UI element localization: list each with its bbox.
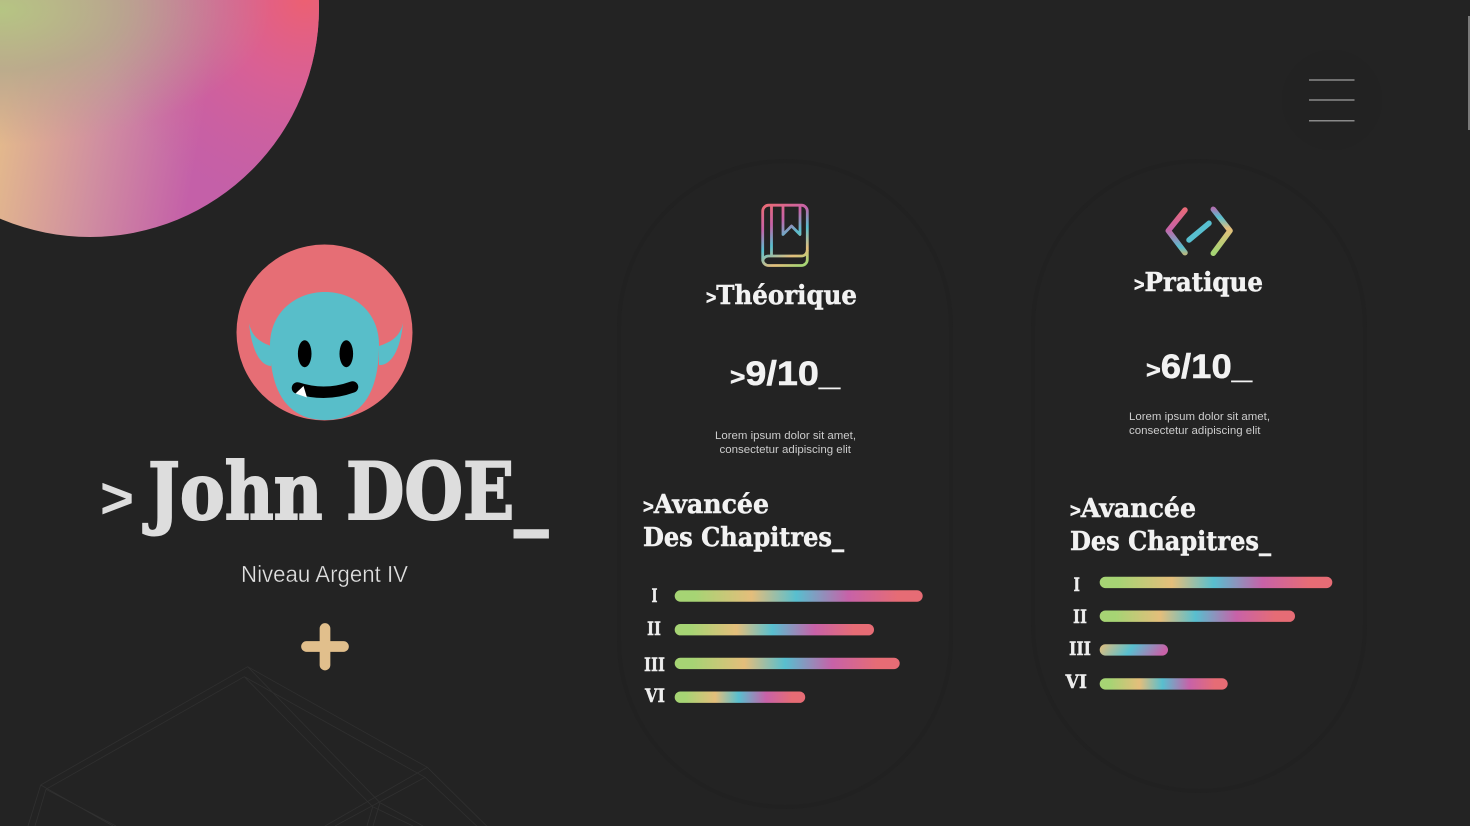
chapter bars <box>644 585 923 707</box>
wireframe polyhedron <box>28 667 487 826</box>
heading: chapter progress: Des Chapitres_ <box>643 523 844 553</box>
chapter bars: VI <box>1065 671 1087 693</box>
description text: Lorem ipsum dolor sit amet, <box>715 430 856 442</box>
icon: code brackets <box>1168 209 1230 253</box>
heading: chapter progress: >Avancée <box>643 490 769 520</box>
title: > <box>100 466 134 531</box>
description text <box>1129 411 1270 437</box>
description text: Lorem ipsum dolor sit amet, <box>1129 411 1270 423</box>
icon: plus button <box>306 628 344 665</box>
chapter bars: I <box>652 585 658 607</box>
heading: chapter progress <box>1070 494 1271 557</box>
description text: consectetur adipiscing elit <box>1129 425 1260 437</box>
decorative gradient circle <box>0 0 330 245</box>
score: 9/10: >9/10_ <box>730 355 841 393</box>
heading: pratique: >Pratique <box>1134 268 1263 298</box>
panel: pratique <box>1033 161 1365 791</box>
title: John DOE_ <box>143 445 548 538</box>
heading: chapter progress <box>643 490 844 553</box>
chapter bars: II <box>647 618 661 640</box>
level subtitle: Niveau Argent IV <box>241 561 409 587</box>
chapter bars: III <box>1069 638 1091 660</box>
chapter bars: I <box>1074 574 1080 596</box>
heading: chapter progress: >Avancée <box>1070 494 1196 524</box>
menu icon <box>1282 50 1382 150</box>
chapter bars: II <box>1073 606 1087 628</box>
chapter bars <box>1065 574 1332 693</box>
chapter bars: III <box>644 654 665 676</box>
panel: théorique <box>619 161 951 807</box>
description text <box>715 430 856 456</box>
chapter bars: VI <box>644 685 665 707</box>
score: 6/10: >6/10_ <box>1146 348 1253 386</box>
scrollbar <box>1468 16 1470 130</box>
avatar: monster face <box>236 244 412 420</box>
heading: chapter progress: Des Chapitres_ <box>1070 527 1271 557</box>
icon: book <box>763 205 807 266</box>
description text: consectetur adipiscing elit <box>720 444 851 456</box>
heading: théorique: >Théorique <box>706 280 857 311</box>
